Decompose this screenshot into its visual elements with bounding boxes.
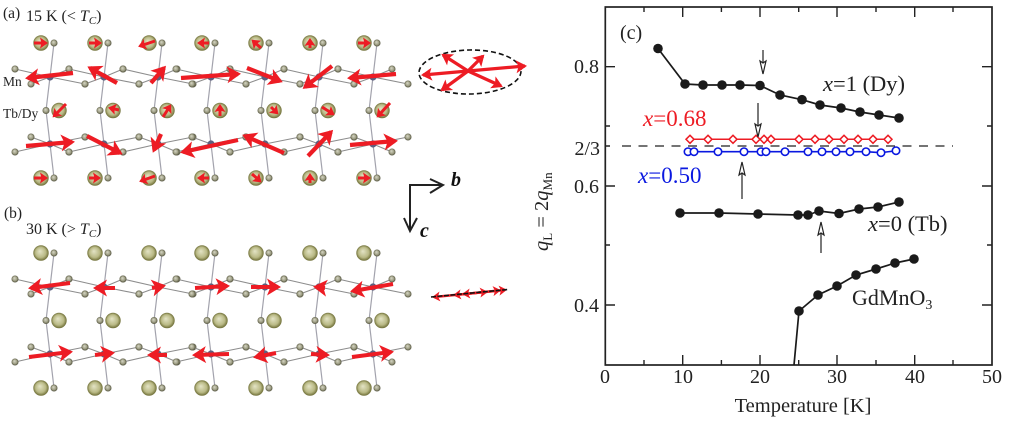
panel: (b) 30 K crystal structure (4, 205, 412, 396)
heading: 30 K above Tc: ) (96, 221, 101, 238)
series: x=1 (Dy) (653, 44, 904, 123)
two-thirds dashed reference line (622, 145, 953, 147)
label: x=1 (Dy): x=1 (Dy) (822, 71, 905, 96)
y axis title: Mn (540, 172, 555, 190)
label: b: b (451, 169, 461, 191)
label: x=0.68: x=0.68 (642, 106, 706, 131)
heading: 30 K above Tc: C (89, 228, 97, 240)
heading: 30 K above Tc: 30 K (> T (26, 221, 89, 238)
panel: (c) q_L versus temperature chart (531, 7, 1002, 417)
heading: panel b label: (b) (4, 205, 22, 222)
y axis title: L (540, 233, 555, 241)
panel c label: (c) (620, 22, 642, 44)
arrows: Tb/Dy spins (34, 40, 390, 183)
series: x=0.50 (684, 147, 900, 156)
label: c: c (420, 220, 429, 242)
lattice a (12, 35, 412, 186)
y axis tick labels: 0.8 (574, 56, 599, 78)
label: Mn: Mn (3, 74, 22, 89)
x axis title: Temperature [K] (735, 395, 871, 417)
chart frame and ticks (605, 7, 992, 365)
x axis tick labels: 40 (905, 366, 925, 388)
diagram: collinear sinusoidal spins (431, 290, 508, 297)
series: GdMnO3 (794, 254, 919, 365)
x axis tick labels: 10 (673, 366, 693, 388)
heading: panel a label: (a) (3, 5, 20, 22)
label: x=0 (Tb): x=0 (Tb) (867, 211, 948, 236)
arrows: Mn spins (26, 66, 396, 156)
x axis tick labels (600, 366, 1002, 388)
diagram: elliptical spin spiral (419, 49, 525, 95)
label: GdMnO3: GdMnO (852, 285, 925, 310)
y axis tick labels (574, 56, 600, 317)
arrow: Tb transition (818, 222, 824, 253)
series: x=0.68 (686, 135, 892, 143)
axes: b and c directions (404, 169, 461, 242)
y axis tick labels: 0.4 (574, 295, 599, 317)
y axis tick labels: 0.6 (574, 176, 599, 198)
label: x=0.50: x=0.50 (637, 163, 701, 188)
x axis tick labels: 50 (982, 366, 1002, 388)
label: Tb/Dy: Tb/Dy (3, 106, 38, 121)
x axis tick labels: 20 (750, 366, 770, 388)
arrows: Mn spins (29, 283, 393, 357)
x axis tick labels: 30 (827, 366, 847, 388)
label: GdMnO3: 3 (925, 298, 932, 313)
heading: 15 K below Tc: 15 K (< T (26, 8, 89, 25)
y axis title: q (531, 241, 553, 251)
arrow: Dy transition (760, 50, 766, 74)
lattice b (12, 245, 412, 396)
y axis title: q (531, 190, 553, 201)
series: x=0 (Tb) (675, 197, 904, 220)
panel: (a) 15 K crystal structure (3, 5, 412, 186)
heading: 15 K below Tc: ) (96, 8, 101, 25)
arrow: x=0.50 transition (739, 162, 745, 199)
heading: 15 K below Tc: C (89, 15, 97, 27)
y axis title: = 2 (531, 201, 553, 233)
y axis tick labels: 2/3 (574, 138, 600, 160)
arrow: x=0.68 transition (755, 103, 761, 137)
x axis tick labels: 0 (600, 366, 610, 388)
